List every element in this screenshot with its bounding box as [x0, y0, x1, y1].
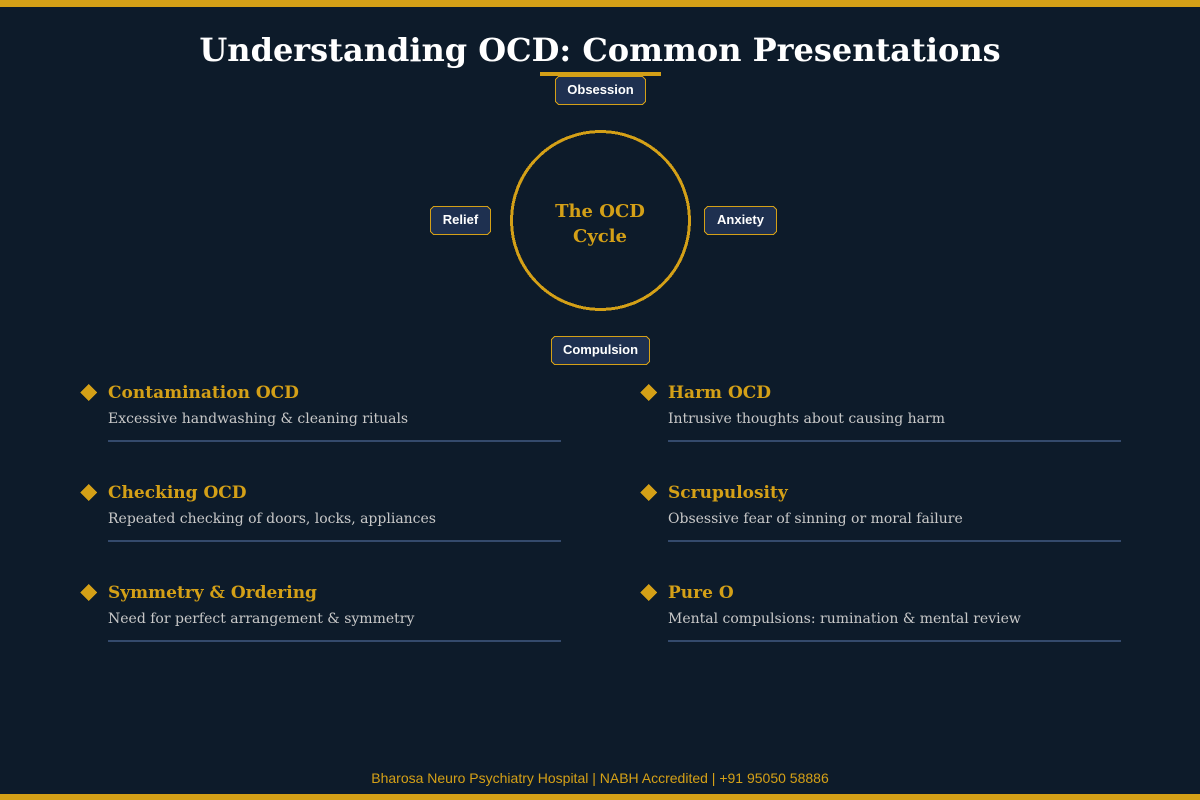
footer: Bharosa Neuro Psychiatry Hospital | NABH Accredited | +91 95050 58886 [371, 770, 829, 786]
item: Contamination OCD: Excessive handwashing & cleaning rituals [108, 411, 408, 427]
item: Scrupulosity: Scrupulosity [668, 483, 788, 503]
item: Harm OCD [640, 383, 1121, 442]
diagram: OCD cycle circle [510, 130, 691, 311]
badge: Relief [430, 206, 491, 235]
title: Understanding OCD: Common Presentations [199, 31, 1001, 69]
item: Checking OCD: Checking OCD [108, 483, 247, 503]
item: Scrupulosity: Obsessive fear of sinning or moral failure [668, 511, 963, 527]
cycle center label [555, 201, 645, 247]
badge: Obsession [555, 76, 646, 105]
badge: Obsession: Obsession [567, 82, 634, 97]
cycle center label: The OCD [555, 201, 645, 222]
badge: Compulsion [551, 336, 650, 365]
item: Symmetry & Ordering: Need for perfect arrangement & symmetry [108, 611, 414, 627]
cycle center label: Cycle [573, 226, 627, 247]
item: Harm OCD: Intrusive thoughts about causing harm [668, 411, 945, 427]
badge: Anxiety: Anxiety [717, 212, 764, 227]
item: Contamination OCD [80, 383, 561, 442]
item: Pure O: Pure O [668, 583, 734, 603]
bottom accent bar [0, 794, 1200, 800]
badge: Anxiety [704, 206, 777, 235]
badge: Compulsion: Compulsion [563, 342, 638, 357]
item: Pure O: Mental compulsions: rumination & mental review [668, 611, 1021, 627]
item: Symmetry & Ordering [80, 583, 561, 642]
badge: Relief: Relief [443, 212, 478, 227]
item: Pure O [640, 583, 1121, 642]
item: Symmetry & Ordering: Symmetry & Ordering [108, 583, 317, 603]
item: Harm OCD: Harm OCD [668, 383, 771, 403]
title underline [540, 72, 661, 76]
item: Checking OCD: Repeated checking of doors, locks, appliances [108, 511, 436, 527]
top accent bar [0, 0, 1200, 7]
item: Contamination OCD: Contamination OCD [108, 383, 299, 403]
item: Checking OCD [80, 483, 561, 542]
item: Scrupulosity [640, 483, 1121, 542]
